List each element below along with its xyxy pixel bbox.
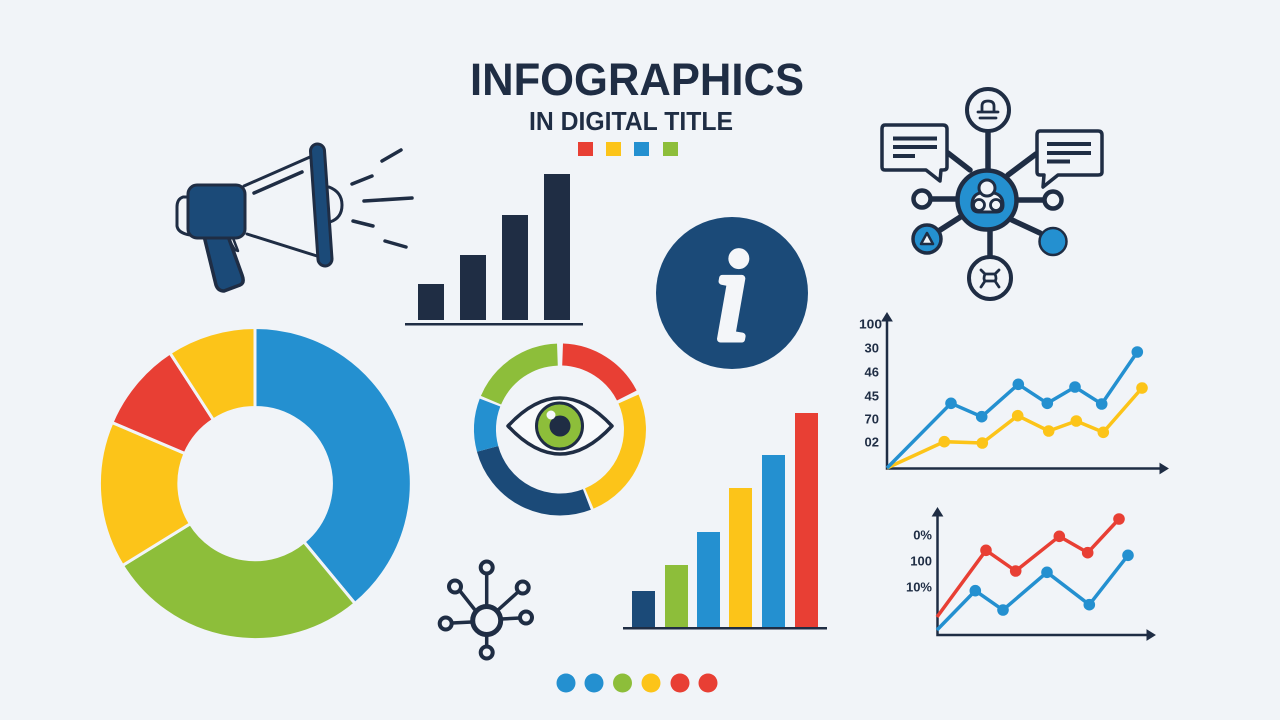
speech bubble right <box>1037 131 1102 187</box>
blue series <box>937 550 1134 630</box>
left node <box>914 190 930 208</box>
blue series <box>887 346 1143 468</box>
ring: green <box>491 355 557 400</box>
axis labels: 02 <box>865 434 879 450</box>
icon: small network <box>440 562 532 658</box>
ring: yellow <box>589 399 635 498</box>
ring: blue <box>485 403 490 449</box>
segment: yellow top <box>170 328 255 420</box>
axis labels: 0% <box>913 528 932 542</box>
axis labels <box>859 316 882 450</box>
ring: navy <box>488 449 587 504</box>
segment: blue <box>255 327 411 604</box>
yellow series <box>887 382 1148 468</box>
axis labels: 30 <box>865 340 879 356</box>
axes <box>932 508 1155 640</box>
axis labels: 100 <box>910 554 932 568</box>
subtitle: IN DIGITAL TITLE <box>529 106 733 136</box>
axis labels: 100 <box>859 316 882 332</box>
bottom node <box>969 257 1011 299</box>
icon: megaphone <box>177 150 412 291</box>
icon: eye <box>508 398 612 454</box>
icon: information circle: i <box>713 221 750 368</box>
colour squares <box>578 142 678 156</box>
segment: red <box>112 353 213 454</box>
segment: yellow left <box>99 422 190 566</box>
axis labels: 70 <box>865 412 879 426</box>
colour dots <box>556 674 718 692</box>
icon: network hub with speech bubbles <box>882 89 1102 299</box>
axis labels: 10% <box>906 580 932 594</box>
central hub <box>958 170 1016 230</box>
line chart: red and blue <box>906 508 1155 640</box>
axis labels: 45 <box>865 388 879 404</box>
donut chart <box>99 327 411 640</box>
bar chart: coloured bars <box>623 413 827 630</box>
segment: green <box>122 524 355 640</box>
title: INFOGRAPHICS <box>470 54 804 105</box>
axes <box>882 313 1168 474</box>
axis labels <box>906 528 932 594</box>
red series <box>937 513 1125 617</box>
speech bubble left <box>882 125 947 181</box>
blue node <box>1040 228 1066 255</box>
ring: red <box>563 354 627 396</box>
axis labels: 46 <box>865 364 879 380</box>
line chart: blue and yellow <box>859 313 1168 474</box>
top node <box>967 89 1009 131</box>
right node <box>1044 192 1062 208</box>
triangle node <box>913 225 941 253</box>
bar chart: dark bars <box>405 174 583 326</box>
eye ring chart <box>485 354 635 504</box>
icon: information circle <box>656 217 808 369</box>
